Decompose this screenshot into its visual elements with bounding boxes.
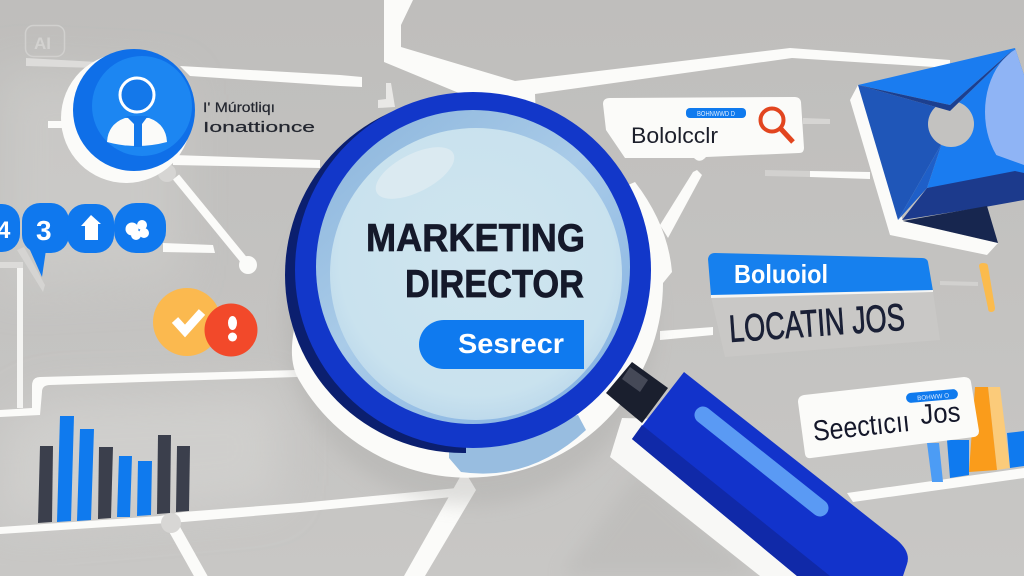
- heading: marketing director: [366, 217, 585, 306]
- icon: red search: [760, 108, 793, 142]
- pill label: [686, 108, 746, 118]
- heading: marketing director: MARKETING: [366, 217, 585, 260]
- selection jobs card: Seectıcıı: [811, 406, 911, 448]
- chat bubbles row: 3: [36, 215, 52, 246]
- lens highlight: [368, 137, 462, 209]
- handle white edge: [610, 418, 840, 576]
- profile label text: I' Múrotliqı: [203, 99, 275, 115]
- watermark: AI: [26, 26, 64, 56]
- search button: [419, 320, 584, 369]
- location jobs card: LOCATIN JOS: [728, 297, 906, 351]
- lens shadow tint: [449, 415, 586, 474]
- search tag card: Bololcclr: [631, 123, 718, 148]
- bar chart: right: [927, 387, 1024, 482]
- pill label: [906, 389, 958, 403]
- handle: [632, 372, 908, 576]
- magnifying glass: [285, 92, 908, 576]
- watermark: AI: AI: [34, 34, 51, 53]
- lens white halo: [292, 182, 672, 478]
- location jobs card: Boluoiol: [734, 259, 828, 289]
- lens glass: [330, 128, 622, 420]
- status badges: [153, 288, 258, 356]
- selection jobs card: [798, 377, 979, 458]
- lens frame: [295, 92, 651, 448]
- profile label text: Ionattionce: [203, 119, 315, 136]
- icon: house: [81, 215, 101, 240]
- pill label: BOHNWWD D: [697, 111, 735, 118]
- chat bubbles row: [0, 203, 166, 277]
- search tag card: [603, 97, 804, 161]
- lens frame dark edge: [285, 112, 466, 453]
- search button: Sesrecr: [458, 328, 564, 359]
- profile label text: [203, 99, 315, 136]
- icon: cloud blob: [126, 220, 149, 240]
- lens ring: [316, 110, 630, 424]
- envelope icon: [850, 44, 1024, 255]
- heading: marketing director: DIRECTOR: [405, 263, 584, 306]
- handle connector: [606, 362, 668, 423]
- bar chart: [38, 416, 190, 523]
- yellow marker: [979, 263, 995, 312]
- location jobs card: [708, 253, 940, 357]
- pill label: BOHWW O: [917, 393, 949, 402]
- selection jobs card: Jos: [919, 396, 961, 430]
- profile icon: person with tie: [61, 49, 195, 183]
